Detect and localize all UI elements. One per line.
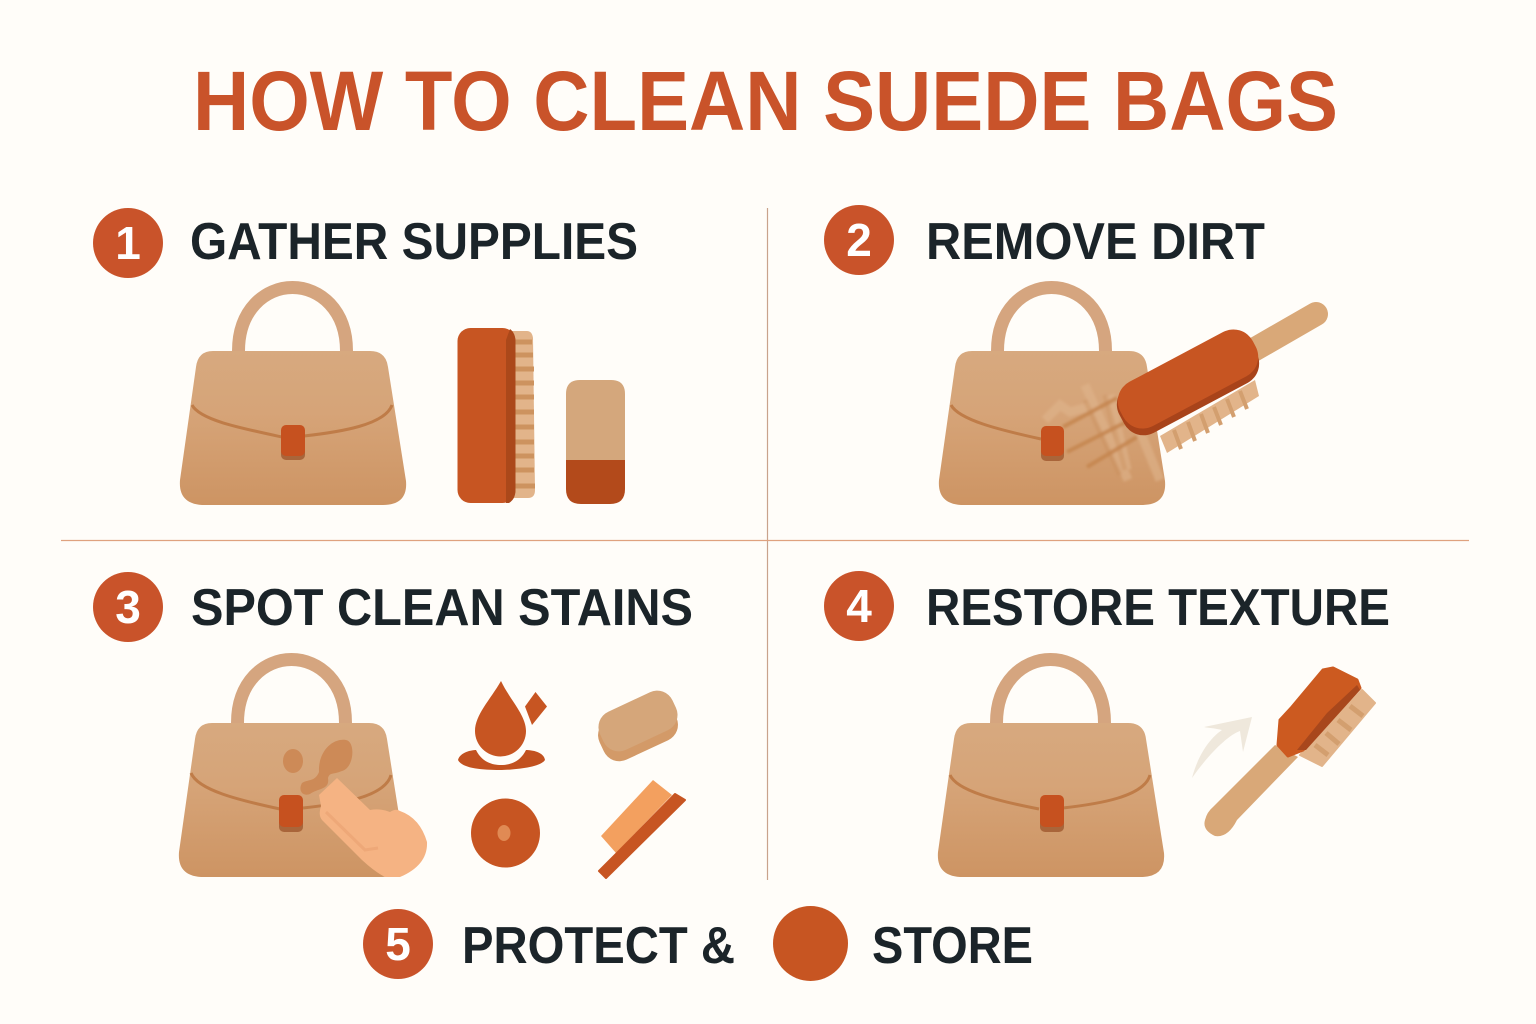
icon: texture brush bbox=[1204, 668, 1375, 836]
icon: suede brush bbox=[458, 328, 535, 503]
panel: step 5 protect and store bbox=[363, 906, 1033, 981]
step 5 heading start: PROTECT & bbox=[462, 917, 735, 975]
icon: brush bristles bbox=[1160, 380, 1259, 453]
panel: step 4 restore texture bbox=[824, 571, 1390, 877]
title: HOW TO CLEAN SUEDE BAGS bbox=[193, 54, 1338, 148]
step 2 heading: REMOVE DIRT bbox=[926, 213, 1265, 271]
step 1 number badge bbox=[93, 208, 163, 278]
icon: brush handle bbox=[1250, 314, 1316, 352]
step 4 heading: RESTORE TEXTURE bbox=[926, 579, 1390, 637]
icon: protect circle bbox=[773, 906, 848, 981]
panel: step 2 remove dirt bbox=[824, 205, 1316, 505]
step 1 heading: GATHER SUPPLIES bbox=[190, 213, 638, 271]
step 5 number badge: 5 bbox=[385, 918, 411, 970]
step 5 heading end: STORE bbox=[872, 917, 1033, 975]
icon: motion arrow bbox=[1192, 717, 1252, 778]
icon: sponge bbox=[592, 685, 684, 767]
icon: restored bag bbox=[938, 660, 1164, 877]
step 4 number badge bbox=[824, 571, 894, 641]
panel: step 3 spot clean stains bbox=[93, 572, 693, 878]
step 1 number badge: 1 bbox=[115, 217, 141, 269]
icon: cleaning disc bbox=[471, 798, 540, 868]
icon: water drop bbox=[458, 681, 547, 770]
icon: suede bag bbox=[180, 288, 406, 505]
icon: brush head bbox=[1109, 322, 1267, 443]
step 3 number badge: 3 bbox=[115, 581, 141, 633]
step 3 heading: SPOT CLEAN STAINS bbox=[191, 579, 693, 637]
icon: bag with brushing streaks bbox=[939, 288, 1165, 505]
step 4 number badge: 4 bbox=[846, 580, 872, 632]
icon: hand dabbing stain bbox=[319, 778, 427, 877]
step 3 number badge bbox=[93, 572, 163, 642]
icon: eraser block bbox=[599, 780, 685, 878]
icon: stained bag bbox=[179, 660, 405, 877]
panel: step 1 gather supplies bbox=[93, 208, 638, 505]
step 2 number badge: 2 bbox=[846, 214, 872, 266]
icon: suede cleaner bottle bbox=[566, 380, 625, 504]
step 2 number badge bbox=[824, 205, 894, 275]
step 5 number badge bbox=[363, 909, 433, 979]
